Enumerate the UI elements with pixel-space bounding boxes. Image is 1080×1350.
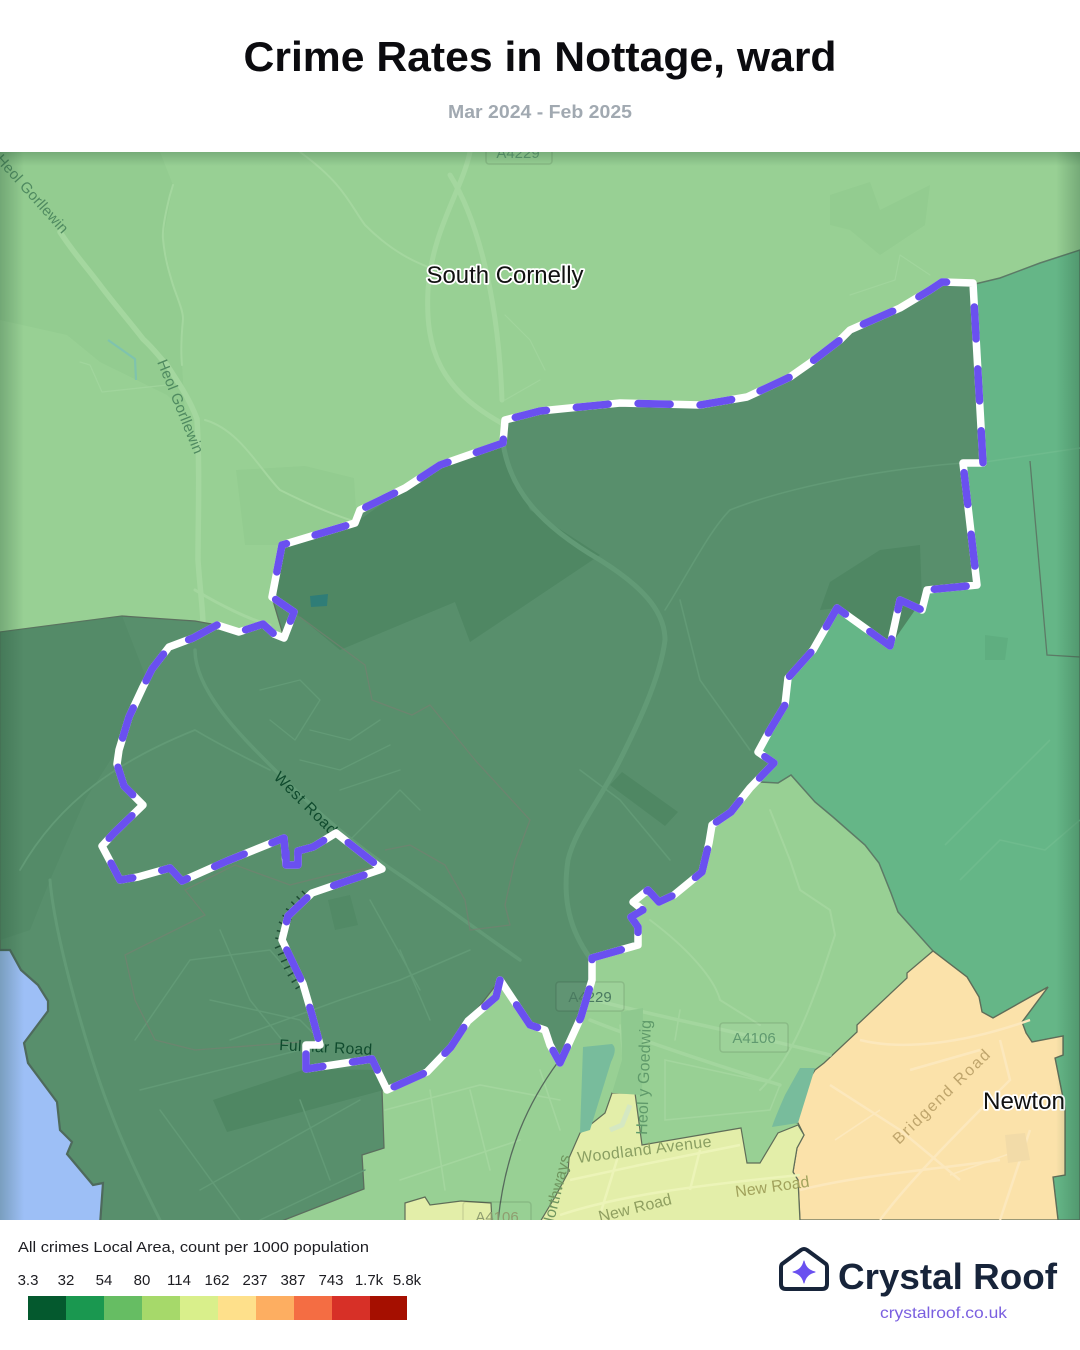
legend scale labels: 54 <box>96 1272 112 1289</box>
title: Crime Rates in Nottage, ward <box>244 33 836 80</box>
water: small pond <box>310 594 328 607</box>
area: darker woodland patches <box>0 443 922 1132</box>
area: Nottage ward and western neighbour <box>0 282 983 1222</box>
legend scale labels: 743 <box>318 1272 344 1289</box>
ward boundary: Nottage <box>102 282 983 1090</box>
map labels <box>0 145 1065 1231</box>
water: ponds <box>580 1044 815 1133</box>
legend scale labels <box>18 1272 422 1289</box>
legend colour bar <box>28 1296 407 1320</box>
roads: east ward <box>945 448 1080 880</box>
road shields <box>463 135 788 1231</box>
map labels: Northways <box>539 1153 574 1231</box>
map labels: Heol y Goedwig <box>634 1020 655 1135</box>
legend title: All crimes Local Area, count per 1000 population <box>18 1239 369 1256</box>
subtitle: date range: Mar 2024 - Feb 2025 <box>448 101 632 122</box>
map labels: West Road <box>270 769 340 839</box>
legend scale labels: 32 <box>58 1272 74 1289</box>
illegible street label fragments under the boundary <box>279 894 306 990</box>
area: pale yellow ward <box>405 1093 804 1222</box>
legend scale labels: 5.8k <box>393 1272 422 1289</box>
map labels: Bridgend Road <box>890 1047 994 1148</box>
legend <box>18 1239 422 1320</box>
map labels: Woodland Avenue <box>576 1134 713 1167</box>
legend scale labels: 114 <box>167 1272 191 1289</box>
area: east ward <box>740 250 1080 1220</box>
wordmark: Crystal Roof <box>838 1256 1058 1297</box>
roads: inside ward <box>20 443 963 1220</box>
area: south central roads <box>385 810 835 1190</box>
map edge shading <box>0 152 1080 1220</box>
map labels: A4229 <box>568 989 612 1006</box>
roads: north area <box>58 152 504 626</box>
map labels: A4106 <box>475 1209 519 1226</box>
legend scale labels: 3.3 <box>18 1272 38 1289</box>
thin railway line <box>498 1062 558 1222</box>
map labels: Heol Gorllewin <box>153 357 207 456</box>
logo: Crystal Roof <box>781 1249 1058 1322</box>
roads: Newton <box>800 1020 1030 1220</box>
roads: pale yellow ward <box>560 1105 800 1215</box>
legend scale labels: 80 <box>134 1272 150 1289</box>
website link: crystalroof.co.uk <box>880 1305 1008 1322</box>
area: Newton ward <box>784 951 1065 1220</box>
legend scale labels: 237 <box>242 1272 268 1289</box>
water: stream <box>108 340 136 380</box>
legend scale labels: 1.7k <box>355 1272 384 1289</box>
legend scale labels: 162 <box>204 1272 230 1289</box>
area: darker fields in the north <box>0 152 930 545</box>
map labels: New Road <box>734 1174 811 1201</box>
map labels: New Road <box>597 1191 673 1226</box>
legend scale labels: 387 <box>280 1272 306 1289</box>
map labels: A4229 <box>496 145 540 162</box>
footpaths: brown lines <box>125 617 530 1050</box>
map labels: A4106 <box>732 1030 776 1047</box>
map labels: South Cornelly <box>426 262 584 289</box>
map labels: Newton <box>983 1088 1065 1115</box>
sea <box>0 950 103 1225</box>
icon: house with star <box>781 1249 827 1289</box>
map labels: Fulmar Road <box>279 1037 373 1059</box>
